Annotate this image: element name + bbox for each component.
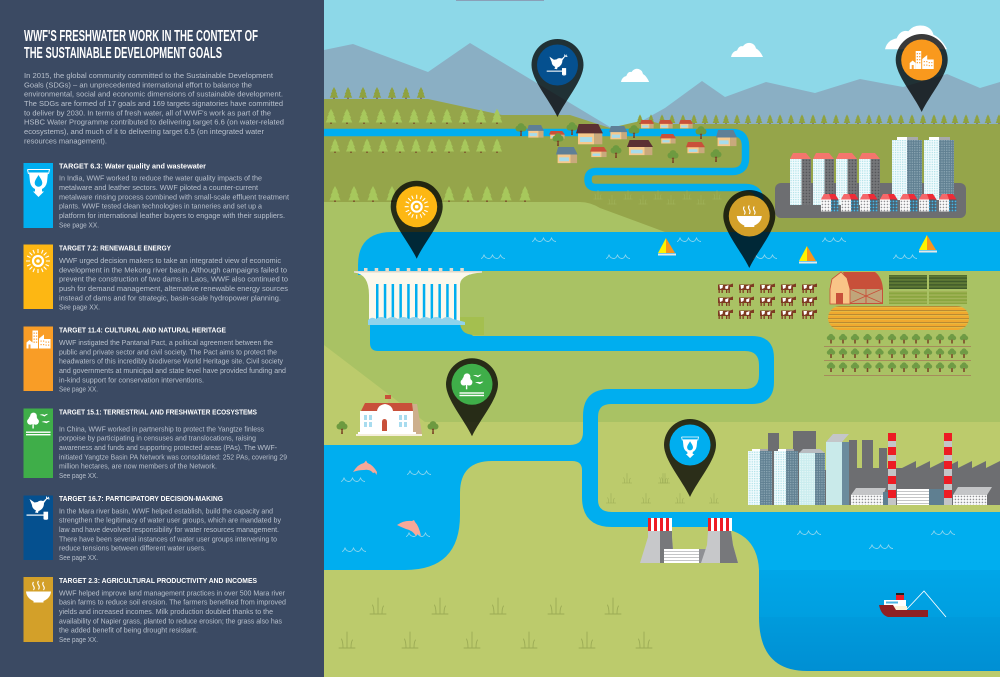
body: porpoise by participating in censuses and translocations, raising (59, 434, 256, 443)
body: In the Mara river basin, WWF helped establish, build the capacity and (59, 506, 273, 515)
low factory buildings (851, 487, 992, 505)
barn (830, 272, 883, 304)
pin: water quality (664, 419, 716, 497)
body: In India, WWF worked to reduce the water quality impacts of the (59, 174, 262, 182)
body: yields and increased incomes. Milk production doubled thanks to the (59, 607, 273, 616)
crop plots (889, 275, 967, 304)
introduction text: resources management). (24, 136, 107, 145)
orchard rows (824, 334, 971, 376)
target 2.3 (24, 576, 286, 644)
pine trees (326, 87, 1000, 202)
body: metalware and leather sectors. WWF piloted a counter-current (59, 183, 259, 192)
ground: lime lowland (324, 345, 1000, 677)
body: plants. WWF tested clean technologies in tanneries and set up a (59, 202, 263, 211)
wide river (358, 232, 1000, 275)
body: See page XX. (59, 385, 98, 394)
residential city (775, 137, 966, 218)
body (59, 338, 286, 394)
red and grey chimneys (888, 433, 952, 505)
body: strengthen the legitimacy of water user groups, which are mandated by (59, 516, 281, 525)
upper river (324, 132, 760, 235)
body: initiated Yangtze Basin PA Network was consolidated: 252 PAs, covering 29 (59, 452, 287, 461)
body: the added benefit of being drought resistant. (59, 626, 198, 635)
target 15.1 (24, 408, 287, 480)
pin: agricultural productivity (723, 190, 775, 268)
heading: TARGET 15.1: TERRESTRIAL AND FRESHWATER ECOSYSTEMS (59, 408, 257, 416)
mountains (324, 43, 1000, 130)
heading: TARGET 7.2: RENEWABLE ENERGY (59, 244, 171, 252)
pin: terrestrial ecosystems (446, 358, 498, 436)
towers (748, 434, 849, 505)
body: metalware rinsing process combined with small-scale effluent treatment (59, 192, 290, 201)
body: platform for international leather buyers to engage with their suppliers. (59, 211, 285, 220)
fishing boat (879, 591, 946, 617)
introduction text: environmental, social and economic dimensions of sustainable development. (24, 90, 283, 99)
title (24, 28, 258, 62)
target 16.7 (24, 494, 281, 562)
body: WWF helped improve land management practices in over 500 Mara river (59, 588, 285, 597)
tile: decision-making (24, 496, 53, 560)
body: In China, WWF worked in partnership to protect the Yangtze finless (59, 424, 264, 433)
body: public and private sector and civil society. The Pact aims to protect the (59, 347, 277, 356)
pin: participatory decision-making (532, 39, 584, 117)
heading: TARGET 16.7: PARTICIPATORY DECISION-MAKING (59, 494, 223, 503)
sailboats (658, 235, 937, 264)
introduction text: ecosystems), and much of it to delivering target 6.5 (on integrated water (24, 127, 264, 136)
ground: olive hills (324, 99, 1000, 240)
sea (700, 512, 1000, 671)
body: basin farms to reduce soil erosion. The farmers benefited from improved (59, 598, 286, 607)
tile: agriculture (24, 577, 53, 642)
body (59, 506, 281, 562)
body (59, 174, 290, 229)
wheat field (828, 306, 969, 330)
introduction text: Goals (SDGs) – an unprecedented international effort to balance the (24, 80, 252, 89)
body: availability of Napier grass, planted to reduce erosion; the grass also has (59, 616, 282, 625)
city base (775, 183, 966, 218)
body: prevent the construction of two dams in Laos, WWF also continued to (59, 275, 288, 284)
heritage school building (336, 395, 438, 436)
grass corner by dam (460, 317, 484, 335)
introduction text: In 2015, the global community committed to the Sustainable Development (24, 71, 274, 80)
title: THE SUSTAINABLE DEVELOPMENT GOALS (24, 45, 222, 62)
heading: TARGET 2.3: AGRICULTURAL PRODUCTIVITY AND INCOMES (59, 576, 257, 585)
introduction text: HSBC Water Programme contributed to delivering target 6.6 (on water-related (24, 118, 284, 127)
heading: TARGET 6.3: Water quality and wastewater (59, 162, 206, 170)
body: See page XX. (59, 553, 98, 562)
introduction text: The SDGs are formed of 17 goals and 169 targets signatories have committed (24, 99, 283, 108)
body: awareness and funds and supporting protected areas (PAs). The WWF- (59, 443, 277, 452)
body: See page XX. (59, 220, 99, 229)
body: WWF instigated the Pantanal Pact, a political agreement between the (59, 338, 273, 347)
tile: water quality (24, 163, 53, 228)
heading: TARGET 11.4: CULTURAL AND NATURAL HERITAGE (59, 326, 226, 334)
cooling towers (640, 518, 738, 563)
body: See page XX. (59, 303, 100, 312)
body: See page XX. (59, 471, 98, 480)
body: and governments at municipal and state level have provided funding and (59, 366, 286, 375)
cows (718, 284, 817, 319)
body: law and have devolved responsibility for water resources management. (59, 525, 279, 534)
dolphins (353, 460, 421, 536)
body: million hectares, are now members of the Network. (59, 462, 217, 471)
lake and lower river (324, 320, 774, 570)
body: headwaters of this incredibly biodiverse World Heritage site. Civil society (59, 357, 283, 366)
body: There have been several instances of water user groups intervening to (59, 534, 277, 543)
target 7.2 (24, 244, 288, 312)
body: reduce tensions between different water users. (59, 544, 206, 553)
pin: renewable energy (391, 181, 443, 259)
ground: light green plain (324, 202, 1000, 430)
introduction text (24, 71, 284, 145)
body: development in the Mekong river basin. Although campaigns failed to (59, 265, 287, 274)
sky background (324, 0, 1000, 135)
body (59, 588, 286, 644)
tile: cultural heritage (24, 326, 53, 391)
body: See page XX. (59, 635, 98, 644)
body: instead of dams and for strategic, basin-scale hydropower planning. (59, 293, 281, 302)
factory silhouette (768, 431, 1000, 505)
village: houses and trees (516, 120, 737, 163)
title: WWF'S FRESHWATER WORK IN THE CONTEXT OF (24, 28, 258, 45)
body (59, 256, 288, 312)
hydroelectric dam (354, 268, 482, 325)
top edge mark (456, 0, 544, 1)
grass tufts on lowland (339, 473, 719, 648)
tile: renewable energy (24, 244, 53, 309)
body: WWF urged decision makers to take an integrated view of economic (59, 256, 281, 265)
left panel (0, 0, 324, 677)
tile: ecosystems (24, 408, 53, 478)
industrial city (748, 431, 1000, 505)
waves (341, 238, 955, 552)
target 11.4 (24, 326, 286, 394)
location pins (391, 34, 948, 497)
body: push for demand management, alternative renewable energy sources (59, 284, 288, 293)
clouds (621, 25, 947, 82)
faint grass tufts on olive ground (594, 190, 721, 204)
body: in-kind support for conservation interventions. (59, 375, 204, 384)
farm (718, 272, 971, 376)
introduction text: to deliver by 2030. In terms of fresh water, all of WWF's work as part of the (24, 108, 271, 117)
body (59, 424, 287, 480)
target 6.3 (24, 162, 290, 229)
pin: cultural and natural heritage (896, 34, 948, 112)
